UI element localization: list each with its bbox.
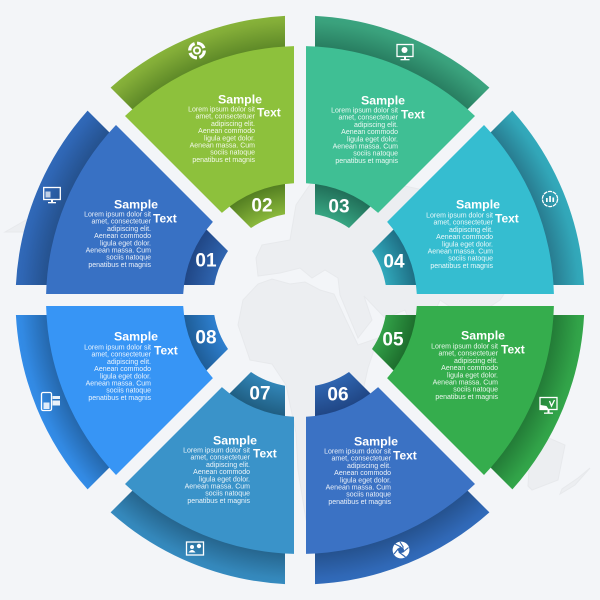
body text 04: Aenean commodo [436, 234, 493, 241]
body text 08: ligula eget dolor. [100, 373, 151, 380]
panel 07 [111, 372, 294, 584]
body text 01: adipiscing elit. [107, 226, 151, 233]
body text 06: Lorem ipsum dolor sit [324, 448, 391, 456]
body text 01: Aenean commodo [94, 233, 151, 240]
body text 07: Aenean massa. Cum [185, 484, 250, 490]
body text 02: amet, consectetuer [195, 114, 256, 121]
heading 07: Sample [213, 434, 257, 448]
body text 03: adipiscing elit. [354, 122, 398, 129]
body text 08: Lorem ipsum dolor sit [84, 344, 151, 352]
body text 01: Aenean massa. Cum [86, 248, 151, 254]
front sector 05 [387, 306, 554, 475]
body text 08: sociis natoque [106, 388, 151, 395]
body text 02: penatibus et magnis [192, 157, 255, 164]
heading 05: Sample [461, 328, 505, 342]
body text 07: amet, consectetuer [190, 455, 251, 462]
body text 05: Aenean commodo [441, 365, 498, 372]
band and number tab 04 [372, 111, 584, 285]
body text 03: penatibus et magnis [335, 158, 398, 165]
body text 06: Aenean commodo [334, 470, 391, 477]
body text 08: amet, consectetuer [91, 352, 152, 359]
body text 01: Lorem ipsum dolor sit [84, 212, 151, 218]
band and number tab 07 [111, 372, 285, 584]
body text 05: adipiscing elit. [454, 358, 498, 365]
body text 02: Lorem ipsum dolor sit [188, 106, 255, 114]
icon: target [190, 43, 204, 58]
body text 01: amet, consectetuer [91, 219, 152, 226]
body text 07: penatibus et magnis [187, 498, 250, 505]
icon: monitor with globe [397, 44, 413, 60]
heading second line 06: Text [393, 448, 417, 462]
panel 06 [306, 372, 489, 584]
heading 02: Sample [218, 92, 262, 106]
body text 08: Aenean massa. Cum [86, 380, 151, 388]
icon: chart badge [542, 191, 558, 207]
panel 02 [111, 16, 294, 228]
band and number tab 03 [315, 16, 489, 228]
front sector 03 [306, 46, 475, 213]
front sector 02 [125, 46, 294, 213]
panel 08 [16, 306, 228, 489]
body text 05: penatibus et magnis [435, 394, 498, 401]
body text 05: ligula eget dolor. [447, 372, 498, 379]
heading 01: Sample [114, 198, 158, 212]
heading second line 01: Text [153, 212, 177, 226]
body text 08: Aenean commodo [94, 366, 151, 373]
body text 07: sociis natoque [205, 491, 250, 498]
body text 05: Lorem ipsum dolor sit [431, 344, 498, 350]
heading second line 07: Text [253, 446, 277, 460]
number 06: 06 [327, 384, 349, 406]
number 08: 08 [195, 328, 217, 348]
number 07: 07 [249, 384, 271, 404]
heading second line 03: Text [401, 108, 425, 122]
body text 04: ligula eget dolor. [442, 241, 493, 248]
body text 04: amet, consectetuer [433, 220, 494, 227]
panel 01 [16, 111, 228, 294]
icon: presentation frame [186, 542, 204, 555]
body text 01: ligula eget dolor. [100, 240, 151, 247]
number 02: 02 [251, 196, 273, 216]
body text 03: sociis natoque [353, 151, 398, 158]
body text 06: penatibus et magnis [328, 499, 391, 506]
body text 07: ligula eget dolor. [199, 476, 250, 483]
body text 08: penatibus et magnis [88, 395, 151, 402]
icon: monitor with plant [540, 398, 557, 414]
front sector 07 [125, 387, 294, 554]
icon: monitor with bars [44, 188, 60, 203]
body text 05: sociis natoque [453, 387, 498, 394]
heading 08: Sample [114, 330, 158, 344]
body text 03: amet, consectetuer [338, 115, 399, 122]
band and number tab 01 [16, 111, 228, 285]
heading second line 08: Text [154, 344, 178, 358]
body text 03: Lorem ipsum dolor sit [331, 108, 398, 114]
body text 04: sociis natoque [448, 256, 493, 263]
front sector 08 [46, 306, 213, 475]
body text 02: sociis natoque [210, 150, 255, 157]
body text 07: Lorem ipsum dolor sit [183, 448, 250, 454]
panel 03 [306, 16, 489, 228]
body text 02: adipiscing elit. [211, 121, 255, 128]
body text 03: Aenean massa. Cum [333, 144, 398, 150]
heading second line 05: Text [501, 342, 525, 356]
icon: camera shutter [393, 542, 409, 558]
body text 05: amet, consectetuer [438, 351, 499, 358]
body text 06: adipiscing elit. [347, 463, 391, 470]
number 05: 05 [382, 330, 404, 350]
body text 02: Aenean commodo [198, 128, 255, 135]
body text 02: ligula eget dolor. [204, 135, 255, 142]
front sector 06 [306, 387, 475, 554]
body text 06: sociis natoque [346, 492, 391, 499]
front sector 04 [387, 125, 554, 294]
band and number tab 06 [315, 372, 489, 584]
band and number tab 08 [16, 315, 228, 489]
world map [5, 165, 590, 530]
body text 04: penatibus et magnis [430, 263, 493, 270]
band and number tab 02 [111, 16, 285, 228]
body text 03: Aenean commodo [341, 129, 398, 136]
number 01: 01 [195, 250, 217, 272]
body text 04: adipiscing elit. [449, 227, 493, 234]
body text 04: Aenean massa. Cum [428, 248, 493, 256]
body text 06: amet, consectetuer [331, 456, 392, 463]
heading 03: Sample [361, 94, 405, 108]
heading 06: Sample [354, 434, 398, 448]
body text 01: sociis natoque [106, 255, 151, 262]
body text 06: Aenean massa. Cum [326, 484, 391, 492]
heading second line 02: Text [257, 106, 281, 120]
number 04: 04 [383, 252, 405, 272]
heading second line 04: Text [495, 212, 519, 226]
panel 04 [372, 111, 584, 294]
body text 01: penatibus et magnis [88, 262, 151, 269]
front sector 01 [46, 125, 213, 294]
number 03: 03 [328, 196, 350, 218]
icon: phone and card [42, 392, 60, 410]
body text 07: Aenean commodo [193, 469, 250, 476]
body text 04: Lorem ipsum dolor sit [426, 212, 493, 220]
body text 05: Aenean massa. Cum [433, 380, 498, 386]
body text 03: ligula eget dolor. [347, 136, 398, 143]
band and number tab 05 [372, 315, 584, 489]
body text 08: adipiscing elit. [107, 359, 151, 366]
body text 02: Aenean massa. Cum [190, 142, 255, 150]
body text 07: adipiscing elit. [206, 462, 250, 469]
heading 04: Sample [456, 198, 500, 212]
body text 06: ligula eget dolor. [340, 477, 391, 484]
panel 05 [372, 306, 584, 489]
